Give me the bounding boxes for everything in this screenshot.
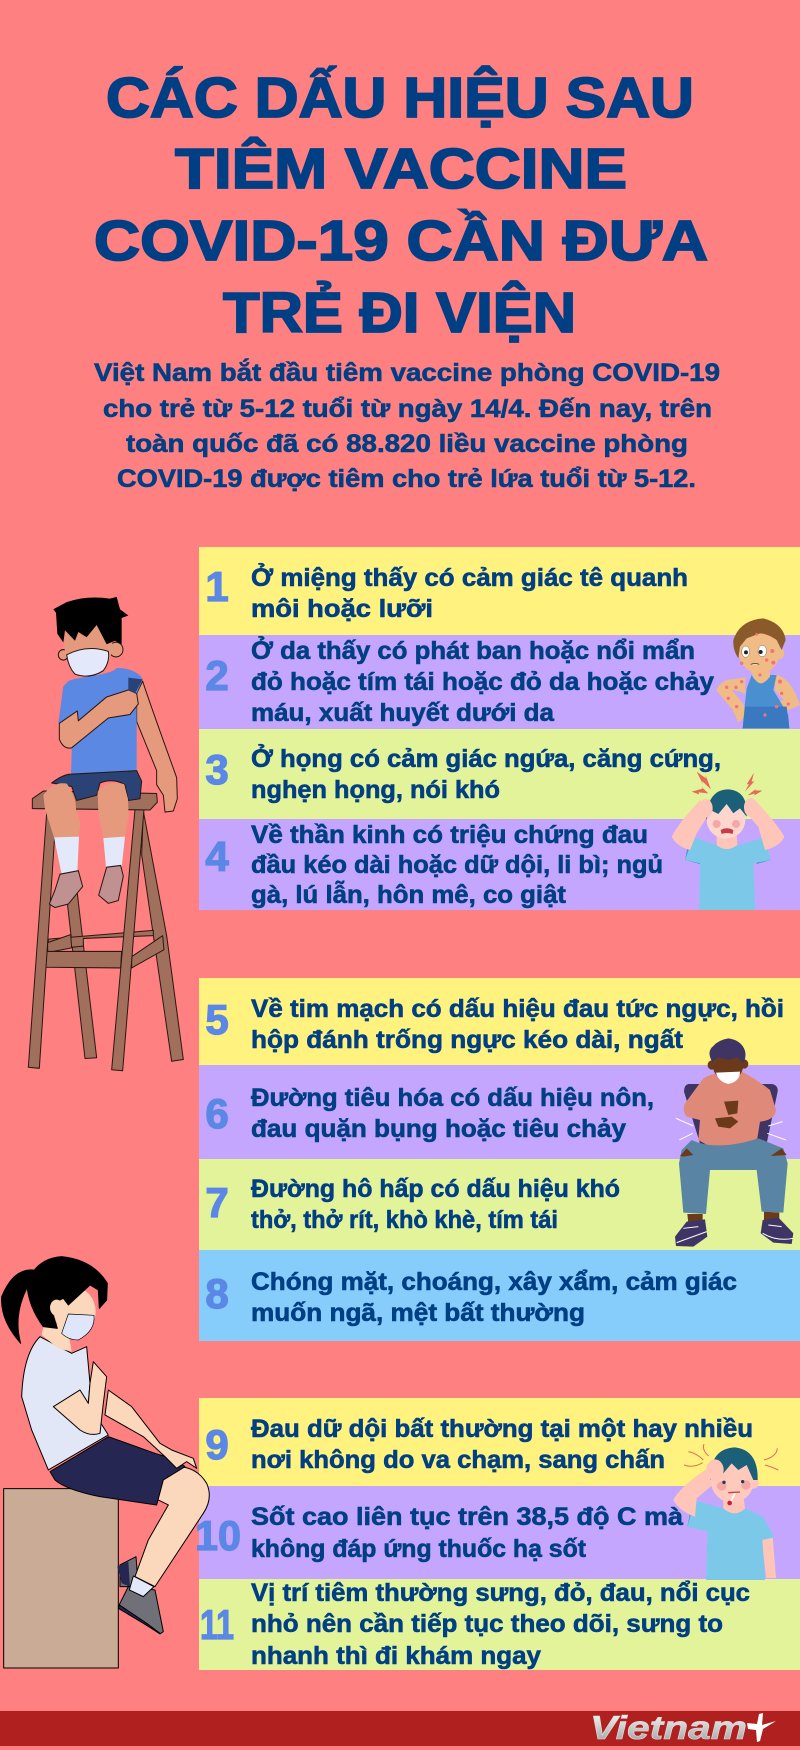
item numbers: 9 [205, 1421, 229, 1468]
item text 1-4: gà, lú lẫn, hôn mê, co giật [251, 879, 567, 909]
title [94, 65, 708, 345]
item text 5-8: Chóng mặt, choáng, xây xẩm, cảm giác [251, 1268, 737, 1296]
intro text [94, 357, 720, 493]
logo: Vietnam+: Vietnam [590, 1709, 747, 1746]
logo: Vietnam+ [590, 1709, 776, 1746]
item text 1-4 [251, 562, 721, 909]
title: TIÊM VACCINE [175, 136, 627, 201]
icon: child with headache [672, 772, 784, 910]
item text 5-8: muốn ngã, mệt bất thường [251, 1299, 585, 1327]
item numbers: 10 [195, 1512, 241, 1559]
item text 9-11: nhanh thì đi khám ngay [251, 1642, 541, 1670]
item numbers: 3 [205, 746, 229, 793]
item numbers: 11 [200, 1601, 234, 1648]
title: TRẺ ĐI VIỆN [223, 280, 576, 345]
item text 5-8: đau quặn bụng hoặc tiêu chảy [251, 1115, 626, 1143]
title: CÁC DẤU HIỆU SAU [106, 65, 694, 130]
item text 5-8: hộp đánh trống ngực kéo dài, ngất [251, 1026, 684, 1054]
item numbers: 1 [205, 563, 229, 610]
item numbers [195, 563, 241, 1648]
item text 9-11: nơi không do va chạm, sang chấn [251, 1446, 665, 1474]
item text 1-4: Ở họng có cảm giác ngứa, căng cứng, [251, 743, 721, 773]
item text 9-11: Đau dữ dội bất thường tại một hay nhiều [251, 1415, 753, 1443]
intro text: Việt Nam bắt đầu tiêm vaccine phòng COVID-19 [94, 357, 720, 387]
intro text: toàn quốc đã có 88.820 liều vaccine phòng [126, 430, 688, 458]
intro text: cho trẻ từ 5-12 tuổi từ ngày 14/4. Đến nay, trên [103, 395, 712, 423]
item numbers: 7 [205, 1179, 229, 1226]
footer bar [0, 1709, 800, 1746]
icon: girl sitting on box [2, 1257, 209, 1668]
item numbers: 5 [205, 996, 229, 1043]
item numbers: 4 [205, 833, 229, 880]
item text 9-11: Vị trí tiêm thường sưng, đỏ, đau, nổi cục [251, 1579, 750, 1607]
item text 9-11: không đáp ứng thuốc hạ sốt [251, 1535, 587, 1563]
item text 9-11: Sốt cao liên tục trên 38,5 độ C mà [251, 1503, 683, 1531]
item text 5-8 [251, 995, 784, 1327]
item text 1-4: Ở da thấy có phát ban hoặc nổi mẩn [251, 635, 695, 665]
item text 1-4: đầu kéo dài hoặc dữ dội, li bì; ngủ [251, 851, 663, 879]
item text 1-4: đỏ hoặc tím tái hoặc đỏ da hoặc chảy [251, 668, 714, 696]
item text 5-8: Đường tiêu hóa có dấu hiệu nôn, [251, 1084, 654, 1112]
colored bands [199, 547, 800, 1670]
title: COVID-19 CẦN ĐƯA [94, 208, 708, 273]
icon: child with chest pain on chair [675, 1038, 793, 1247]
item text 9-11: nhỏ nên cần tiếp tục theo dõi, sưng to [251, 1610, 723, 1638]
item text 1-4: máu, xuất huyết dưới da [251, 699, 555, 727]
item text 1-4: nghẹn họng, nói khó [251, 776, 500, 804]
intro text: COVID-19 được tiêm cho trẻ lứa tuổi từ 5-12. [117, 465, 696, 493]
item text 9-11 [251, 1415, 753, 1670]
item text 1-4: môi hoặc lưỡi [251, 595, 433, 623]
item numbers: 2 [205, 652, 229, 699]
item text 5-8: Đường hô hấp có dấu hiệu khó [251, 1175, 620, 1203]
icon: child with rash [717, 618, 800, 728]
item text 1-4: Về thần kinh có triệu chứng đau [251, 821, 648, 849]
item numbers: 6 [205, 1090, 229, 1137]
item text 5-8: Về tim mạch có dấu hiệu đau tức ngực, hồi [251, 995, 784, 1023]
item numbers: 8 [205, 1270, 229, 1317]
icon: child with fever and thermometer [673, 1444, 778, 1580]
item text 5-8: thở, thở rít, khò khè, tím tái [251, 1206, 558, 1234]
icon: boy on stool touching arm [28, 597, 183, 1071]
item text 1-4: Ở miệng thấy có cảm giác tê quanh [251, 562, 688, 592]
